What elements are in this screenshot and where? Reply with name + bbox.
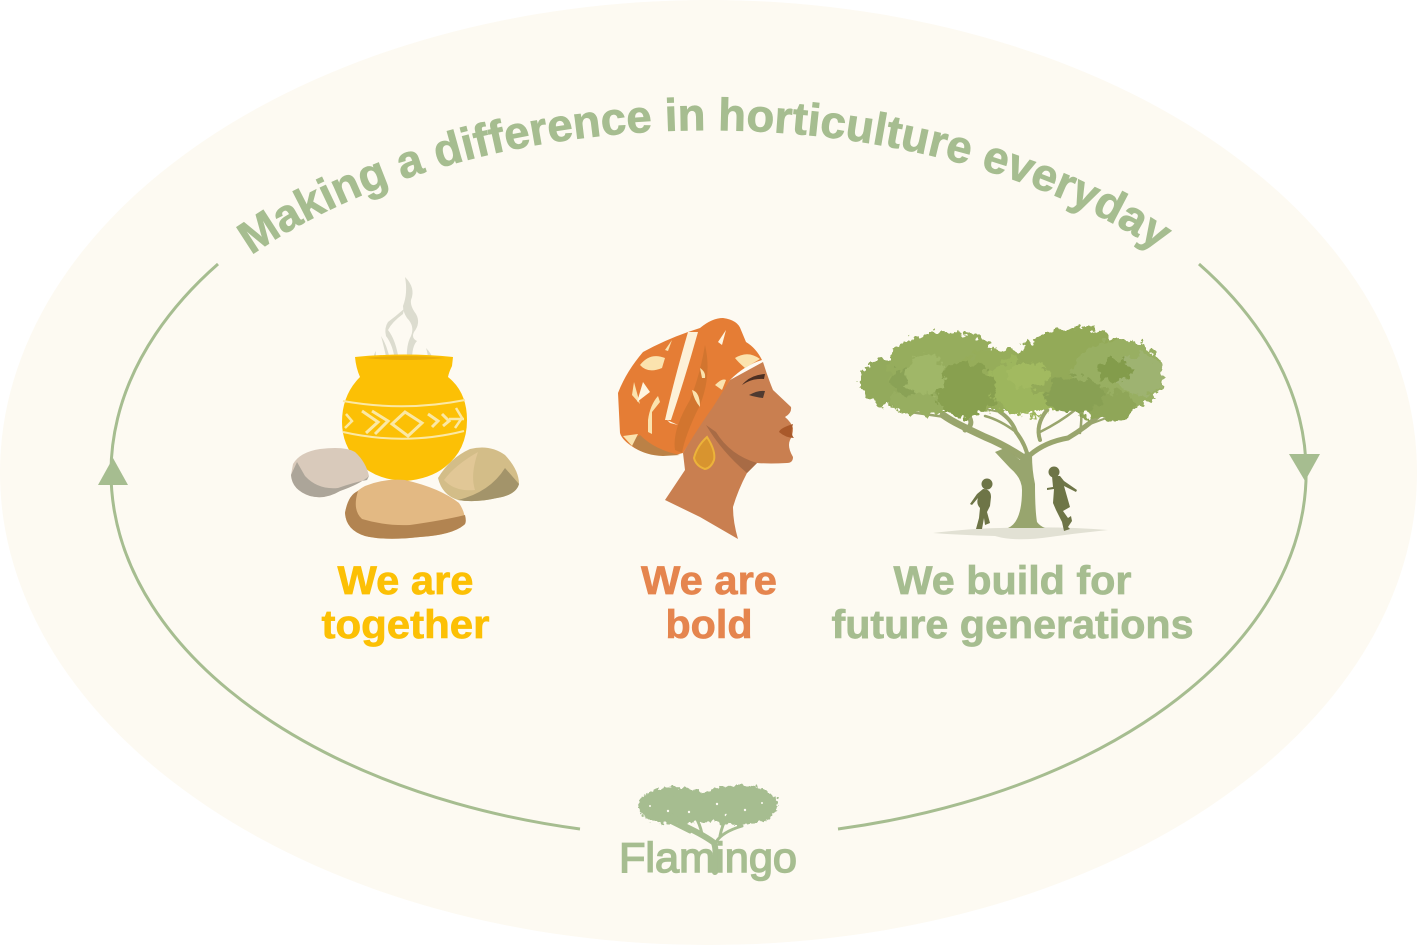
logo wordmark: Flamingo xyxy=(619,834,797,881)
label: we are bold: bold xyxy=(666,603,752,647)
branches xyxy=(910,402,1120,460)
label: we build for future generations: We build for xyxy=(894,559,1132,603)
foliage xyxy=(860,328,1164,420)
wrap pattern xyxy=(623,330,760,446)
arrow: down on right arc xyxy=(1289,454,1320,481)
arrow: up on left arc xyxy=(98,458,128,485)
pot body xyxy=(342,354,467,481)
eyebrow xyxy=(742,374,765,385)
child right xyxy=(1047,466,1077,531)
pot opening shadow xyxy=(365,356,445,360)
steam xyxy=(374,277,433,361)
headwrap xyxy=(618,318,762,455)
ground shadow xyxy=(933,527,1108,539)
front stone xyxy=(345,480,465,539)
jaw shadow xyxy=(706,425,757,473)
cycle line: left arc xyxy=(111,264,580,829)
icon: tree with two children xyxy=(860,328,1164,539)
logo tree foliage xyxy=(638,785,778,825)
pot pattern band xyxy=(343,400,465,439)
logo: Flamingo xyxy=(619,785,797,881)
face and neck xyxy=(665,362,793,539)
white wrap stripe xyxy=(665,332,698,420)
eye xyxy=(749,391,765,398)
wrap folds xyxy=(675,345,708,453)
circular title: Making a difference in horticulture everyday xyxy=(236,96,1172,254)
label: we build for future generations: future generations xyxy=(832,603,1194,647)
label: we are bold: We are xyxy=(641,559,777,603)
trunk xyxy=(995,448,1045,528)
icon: woman in headwrap profile xyxy=(618,318,794,539)
left stone xyxy=(291,448,369,497)
earring xyxy=(694,437,714,469)
logo tree trunk and branches xyxy=(670,815,742,872)
label: we are together: together xyxy=(322,603,490,647)
child left xyxy=(970,478,992,529)
lips xyxy=(779,424,794,438)
label: we are together: We are xyxy=(338,559,474,603)
logo tree specks xyxy=(649,802,763,816)
icon: cooking pot on stones xyxy=(291,277,519,539)
right stone xyxy=(438,447,519,501)
cycle line: right arc xyxy=(838,264,1306,829)
